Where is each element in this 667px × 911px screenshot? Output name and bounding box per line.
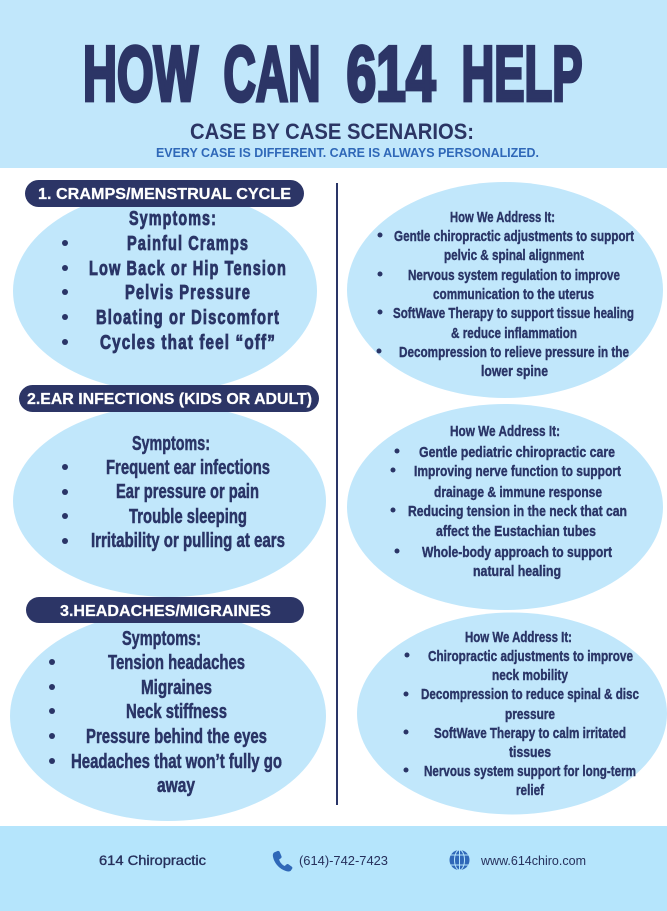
panel: cramps symptoms bbox=[13, 190, 317, 392]
panel: ear infections symptoms: Frequent ear infections bbox=[106, 456, 270, 479]
panel: ear infections treatment: Whole-body approach to support bbox=[422, 544, 612, 561]
panel: ear infections symptoms: Irritability or pulling at ears bbox=[91, 529, 285, 552]
panel: headaches symptoms: Symptoms: bbox=[122, 627, 201, 650]
panel: cramps treatment: & reduce inflammation bbox=[451, 325, 577, 342]
footer band bbox=[0, 826, 667, 911]
panel: ear infections symptoms bbox=[13, 405, 326, 597]
panel: cramps symptoms: Bloating or Discomfort bbox=[96, 307, 280, 329]
title: HOW bbox=[83, 30, 198, 118]
panel: ear infections treatment: affect the Eustachian tubes bbox=[436, 523, 596, 540]
panel: headaches symptoms: Neck stiffness bbox=[126, 700, 227, 723]
heading: cramps pill: 1. CRAMPS/MENSTRUAL CYCLE bbox=[38, 186, 291, 203]
icon: phone bbox=[273, 851, 292, 871]
panel: headaches symptoms: Migraines bbox=[141, 676, 212, 699]
icon: globe bbox=[450, 850, 470, 870]
panel: headaches treatment bbox=[357, 612, 667, 814]
center divider bbox=[336, 183, 338, 805]
panel: headaches symptoms bbox=[10, 611, 326, 821]
panel: headaches symptoms: Pressure behind the eyes bbox=[86, 725, 267, 748]
panel: headaches treatment: pressure bbox=[505, 706, 555, 723]
panel: ear infections treatment: Gentle pediatric chiropractic care bbox=[419, 444, 615, 461]
panel: headaches treatment: How We Address It: bbox=[465, 629, 572, 646]
panel: ear infections treatment: drainage & immune response bbox=[434, 484, 602, 501]
panel: headaches symptoms: Tension headaches bbox=[108, 651, 245, 674]
heading: headaches pill: 3.HEADACHES/MIGRAINES bbox=[60, 603, 271, 620]
title: HELP bbox=[462, 30, 582, 118]
panel: cramps treatment: pelvic & spinal alignment bbox=[444, 247, 584, 264]
panel: cramps treatment: lower spine bbox=[481, 363, 548, 380]
panel: cramps symptoms: Symptoms: bbox=[129, 208, 217, 230]
title: CAN bbox=[224, 30, 320, 118]
panel: ear infections treatment: natural healing bbox=[473, 563, 561, 580]
title: 614 bbox=[346, 30, 436, 118]
panel: cramps treatment: communication to the uterus bbox=[433, 286, 594, 303]
panel: headaches treatment: tissues bbox=[509, 744, 551, 761]
subtitle: CASE BY CASE SCENARIOS: bbox=[190, 119, 474, 144]
tagline: EVERY CASE IS DIFFERENT. CARE IS ALWAYS PERSONALIZED. bbox=[156, 145, 539, 160]
panel: cramps treatment: How We Address It: bbox=[450, 209, 555, 226]
heading: ear infections pill bbox=[19, 385, 319, 412]
heading: headaches pill bbox=[26, 597, 304, 623]
panel: ear infections treatment: Improving nerve function to support bbox=[414, 463, 621, 480]
panel: ear infections symptoms: Symptoms: bbox=[132, 432, 210, 455]
panel: ear infections symptoms: Trouble sleeping bbox=[129, 505, 247, 528]
panel: cramps symptoms: Cycles that feel “off” bbox=[100, 332, 276, 354]
panel: ear infections treatment: How We Address It: bbox=[450, 423, 560, 440]
footer: clinic name: 614 Chiropractic bbox=[99, 852, 206, 868]
panel: headaches treatment: neck mobility bbox=[492, 667, 569, 684]
footer: website: www.614chiro.com bbox=[480, 853, 586, 868]
panel: cramps symptoms: Painful Cramps bbox=[127, 233, 249, 255]
title bbox=[83, 30, 582, 118]
heading: cramps pill bbox=[25, 180, 304, 207]
heading: ear infections pill: 2.EAR INFECTIONS (KIDS OR ADULT) bbox=[27, 391, 312, 408]
footer: phone number: (614)-742-7423 bbox=[299, 853, 388, 868]
panel: cramps symptoms: Low Back or Hip Tension bbox=[89, 258, 287, 280]
panel: headaches treatment: relief bbox=[516, 782, 545, 799]
panel: ear infections symptoms: Ear pressure or pain bbox=[116, 480, 259, 503]
panel: ear infections treatment bbox=[347, 404, 663, 610]
panel: cramps treatment bbox=[347, 182, 663, 398]
panel: cramps symptoms: Pelvis Pressure bbox=[125, 282, 251, 304]
panel: headaches symptoms: Headaches that won’t fully go bbox=[71, 750, 282, 773]
panel: headaches symptoms: away bbox=[157, 774, 195, 797]
header band bbox=[0, 0, 667, 168]
